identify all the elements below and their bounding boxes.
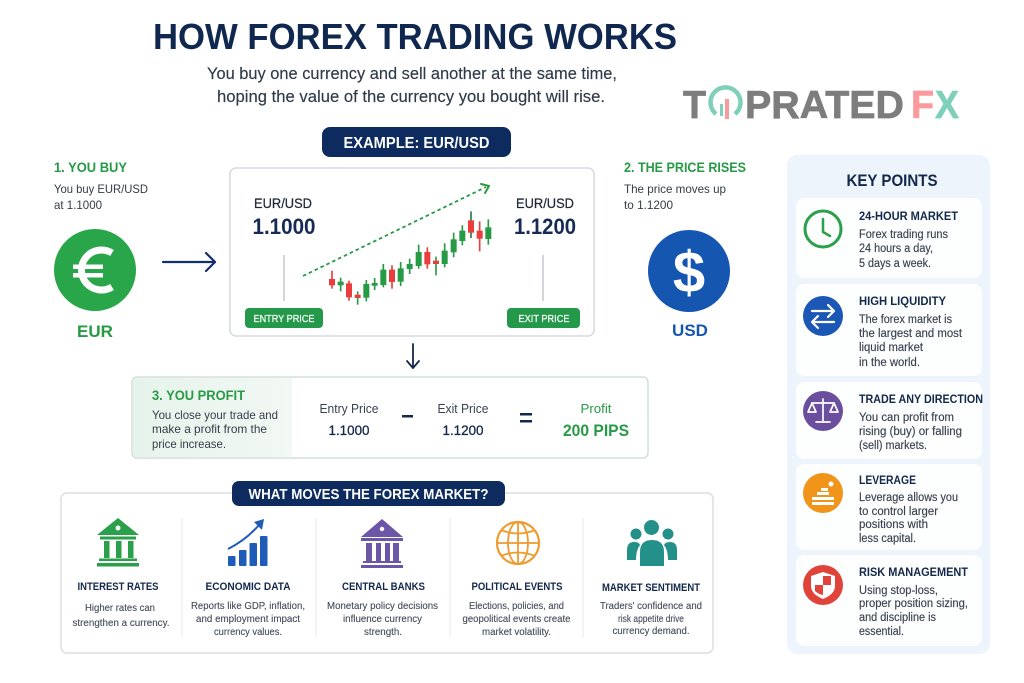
column: market sentiment <box>600 520 702 637</box>
column: interest rates <box>72 518 170 629</box>
logo: TopRatedFX: X <box>935 84 959 127</box>
column: market sentiment: risk appetite drive <box>618 613 684 625</box>
step 2: price rises: 2. THE PRICE RISES <box>624 159 746 175</box>
column: market sentiment: MARKET SENTIMENT <box>602 582 700 594</box>
column: economic data <box>191 519 305 638</box>
panel: what moves the forex market <box>61 481 713 653</box>
card: trade any direction: You can profit from <box>859 412 954 424</box>
card: trade any direction: TRADE ANY DIRECTION <box>859 392 983 406</box>
card: leverage: positions with <box>859 519 928 531</box>
logo: TopRatedFX <box>683 84 959 127</box>
card: 24-hour market <box>796 198 982 278</box>
logo: TopRatedFX: T <box>683 84 706 127</box>
column: central banks: CENTRAL BANKS <box>342 581 425 593</box>
card: leverage: to control larger <box>859 506 938 518</box>
formula: exit price: Exit Price <box>438 402 489 416</box>
step 1: you buy: You buy EUR/USD <box>54 182 148 196</box>
icon: exchange arrows <box>803 296 843 336</box>
formula: profit result: Profit <box>580 402 612 416</box>
step 3 text <box>152 388 278 451</box>
candlesticks <box>329 211 491 305</box>
logo: TopRatedFX: F <box>911 84 934 127</box>
badge: example EUR/USD: EXAMPLE: EUR/USD <box>344 135 490 152</box>
step 1: you buy: EUR <box>77 322 113 341</box>
step 1: you buy <box>54 159 148 341</box>
card: high liquidity: in the world. <box>859 357 920 369</box>
column: interest rates: strengthen a currency. <box>72 617 170 629</box>
icon: blue growth chart <box>228 519 268 566</box>
subtitle: hoping the value of the currency you bought will rise. <box>217 87 605 106</box>
icon: dollar coin <box>648 230 730 312</box>
column: market sentiment: currency demand. <box>612 625 690 637</box>
column: central banks <box>327 519 438 638</box>
column: political events: market volatility. <box>482 626 551 638</box>
card: risk management: essential. <box>859 626 904 638</box>
card: 24-hour market: 24 hours a day, <box>859 243 933 255</box>
icon: dollar coin: $ <box>673 240 705 305</box>
card: trade any direction: (sell) markets. <box>859 440 927 452</box>
column: political events: Elections, policies, and <box>469 600 564 612</box>
card: 24-hour market: 5 days a week. <box>859 258 931 270</box>
card: high liquidity <box>796 284 982 376</box>
step 3 text: You close your trade and <box>152 408 278 422</box>
card: risk management: and discipline is <box>859 612 936 624</box>
badge: example EUR/USD <box>322 127 511 157</box>
column: market sentiment: Traders' confidence and <box>600 600 702 612</box>
column: central banks: influence currency <box>343 613 423 625</box>
heading badge: WHAT MOVES THE FOREX MARKET? <box>248 487 489 503</box>
formula: profit result: 200 PIPS <box>563 421 629 440</box>
icon: people group <box>627 520 677 566</box>
step 3 text: price increase. <box>152 437 226 451</box>
card: high liquidity: The forex market is <box>859 314 952 326</box>
column: economic data: currency values. <box>214 626 282 638</box>
card: leverage: less capital. <box>859 533 916 545</box>
card: leverage <box>796 464 982 550</box>
card: 24-hour market: 24-HOUR MARKET <box>859 209 959 223</box>
column: central banks: strength. <box>364 626 402 638</box>
icon: shield <box>803 565 843 605</box>
formula: entry price <box>320 402 379 438</box>
icon: scales <box>803 391 843 431</box>
formula: entry price: Entry Price <box>320 402 379 416</box>
column: political events: POLITICAL EVENTS <box>472 581 562 593</box>
card: high liquidity: the largest and most <box>859 328 963 340</box>
icon: purple bank <box>361 519 403 568</box>
subtitle <box>207 64 617 106</box>
formula: exit price <box>438 402 489 438</box>
card: high liquidity: HIGH LIQUIDITY <box>859 294 946 308</box>
step 1: you buy: 1. YOU BUY <box>54 159 128 175</box>
formula: entry price: 1.1000 <box>328 422 370 438</box>
entry price label: EUR/USD <box>254 195 312 211</box>
step 2: price rises: to 1.1200 <box>624 198 673 212</box>
step 1: you buy: at 1.1000 <box>54 198 102 212</box>
exit price label: 1.1200 <box>514 214 576 239</box>
icon: green bank <box>97 518 139 566</box>
panel: you profit <box>132 377 648 458</box>
icon: globe <box>497 522 539 564</box>
column: economic data: ECONOMIC DATA <box>206 581 291 593</box>
arrow: buy to chart <box>163 253 215 271</box>
key points heading: KEY POINTS <box>846 172 938 190</box>
formula: exit price: 1.1200 <box>442 422 484 438</box>
exit price label: EXIT PRICE <box>518 313 570 325</box>
formula: profit result <box>563 402 629 440</box>
column: interest rates: INTEREST RATES <box>78 581 158 593</box>
card: risk management: proper position sizing, <box>859 598 968 610</box>
icon: leverage steps <box>803 473 843 513</box>
column: political events: geopolitical events create <box>462 613 571 625</box>
column: political events <box>462 522 571 638</box>
step 3 text: 3. YOU PROFIT <box>152 388 246 403</box>
column: economic data: and employment impact <box>196 613 300 625</box>
card: trade any direction: rising (buy) or falling <box>859 426 962 438</box>
step 3 text: make a profit from the <box>152 422 267 436</box>
equals sign <box>520 413 532 422</box>
icon: euro coin <box>54 229 136 311</box>
entry price label: 1.1000 <box>252 214 316 239</box>
title: HOW FOREX TRADING WORKS <box>153 16 677 57</box>
card: risk management: Using stop-loss, <box>859 585 938 597</box>
entry price label <box>245 195 323 328</box>
heading badge <box>232 481 505 506</box>
column: central banks: Monetary policy decisions <box>327 600 438 612</box>
exit price label: EUR/USD <box>516 195 574 211</box>
entry price label: ENTRY PRICE <box>254 313 314 325</box>
trend arrow <box>303 184 489 276</box>
icon: clock <box>805 211 841 247</box>
card: high liquidity: liquid market <box>859 342 924 354</box>
logo: TopRatedFX: PRATED <box>745 84 904 127</box>
card: leverage: LEVERAGE <box>859 473 916 487</box>
step 2: price rises: USD <box>672 321 708 340</box>
card: risk management: RISK MANAGEMENT <box>859 565 969 579</box>
step 2: price rises <box>624 159 746 340</box>
card: risk management <box>796 555 982 646</box>
step 2: price rises: The price moves up <box>624 182 726 196</box>
card: leverage: Leverage allows you <box>859 492 958 504</box>
exit price label <box>507 195 580 328</box>
panel: price chart <box>230 168 594 336</box>
subtitle: You buy one currency and sell another at the same time, <box>207 64 617 83</box>
column: interest rates: Higher rates can <box>85 602 155 614</box>
minus sign <box>402 415 413 418</box>
panel: key points <box>787 155 990 654</box>
arrow: chart to profit <box>407 344 419 368</box>
column: economic data: Reports like GDP, inflation, <box>191 600 305 612</box>
card: 24-hour market: Forex trading runs <box>859 229 948 241</box>
card: trade any direction <box>796 382 983 459</box>
